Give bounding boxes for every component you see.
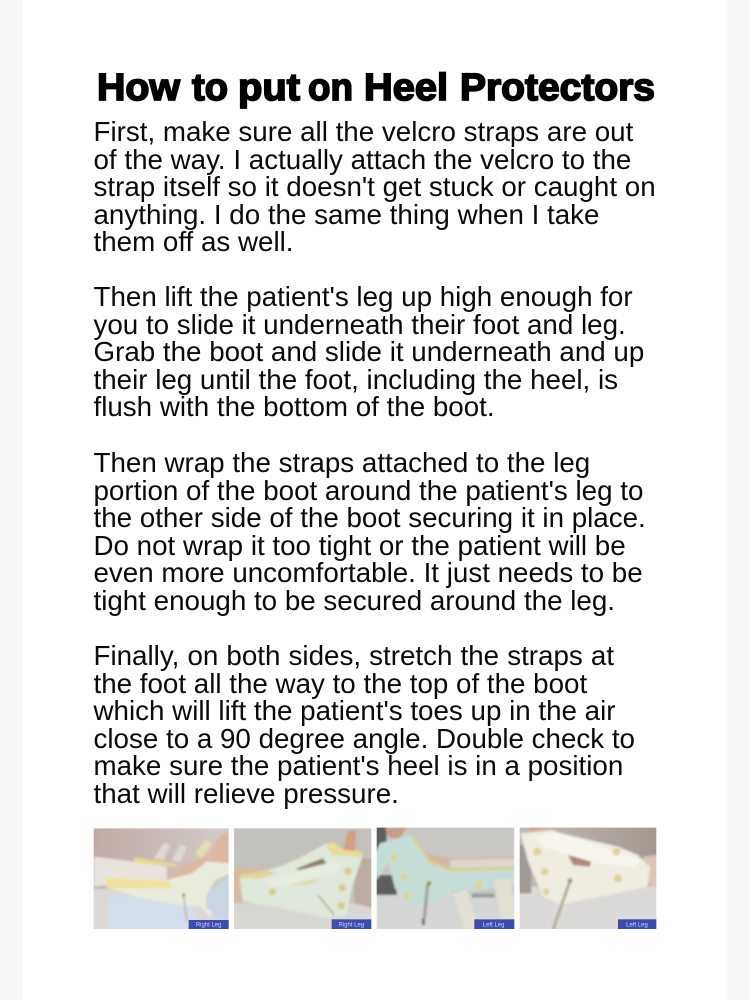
paragraph 4: the foot all the way to the top of the boot: [94, 668, 587, 699]
paragraph 3: the other side of the boot securing it in place.: [94, 502, 646, 533]
title: on: [308, 67, 353, 109]
paragraph 2: Grab the boot and slide it underneath and up: [94, 336, 644, 367]
paragraph 2: Then lift the patient's leg up high enough for: [94, 281, 633, 312]
paragraph 4: close to a 90 degree angle. Double check to: [94, 723, 635, 754]
title: to: [192, 67, 228, 109]
paragraph 1: them off as well.: [94, 226, 294, 257]
paragraph 3: Do not wrap it too tight or the patient will be: [94, 530, 626, 561]
photo: left leg, side one: [375, 825, 515, 932]
paragraph 4: which will lift the patient's toes up in the air: [94, 695, 616, 726]
paragraph 2: you to slide it underneath their foot and leg.: [94, 309, 626, 340]
photo: right leg, side one: [92, 825, 232, 932]
paragraph 4: make sure the patient's heel is in a position: [94, 750, 623, 781]
paragraph 1: strap itself so it doesn't get stuck or caught on: [94, 171, 656, 202]
paragraph 1: First, make sure all the velcro straps are out: [94, 116, 633, 147]
title: put: [238, 67, 300, 109]
title: [97, 67, 655, 109]
paragraph 2: [94, 281, 644, 422]
paragraph 4: Finally, on both sides, stretch the straps at: [94, 640, 614, 671]
photo: left leg, side two: [518, 825, 658, 932]
paragraph 3: even more uncomfortable. It just needs to be: [94, 557, 643, 588]
photo strip: [94, 828, 656, 929]
title: Protectors: [460, 67, 655, 109]
title: How: [97, 67, 180, 109]
label: Right Leg: Right Leg: [339, 922, 364, 928]
paragraph 3: portion of the boot around the patient's leg to: [94, 475, 643, 506]
paragraph 3: Then wrap the straps attached to the leg: [94, 447, 590, 478]
paragraph 1: anything. I do the same thing when I take: [94, 199, 600, 230]
paragraph 2: their leg until the foot, including the heel, is: [94, 364, 618, 395]
paragraph 4: that will relieve pressure.: [94, 778, 399, 809]
title: Heel: [364, 67, 448, 109]
label: Left Leg: Left Leg: [626, 922, 648, 928]
label: Right Leg: Right Leg: [196, 923, 221, 929]
label: Left Leg: Left Leg: [483, 922, 504, 928]
paragraph 1: of the way. I actually attach the velcro to the: [94, 144, 631, 175]
paragraph 4: [94, 640, 635, 809]
paragraph 2: flush with the bottom of the boot.: [94, 391, 495, 422]
paragraph 3: [94, 447, 646, 616]
paragraph 3: tight enough to be secured around the leg.: [94, 585, 615, 616]
photo: right leg, side two: [233, 825, 373, 932]
paragraph 1: [94, 116, 656, 257]
